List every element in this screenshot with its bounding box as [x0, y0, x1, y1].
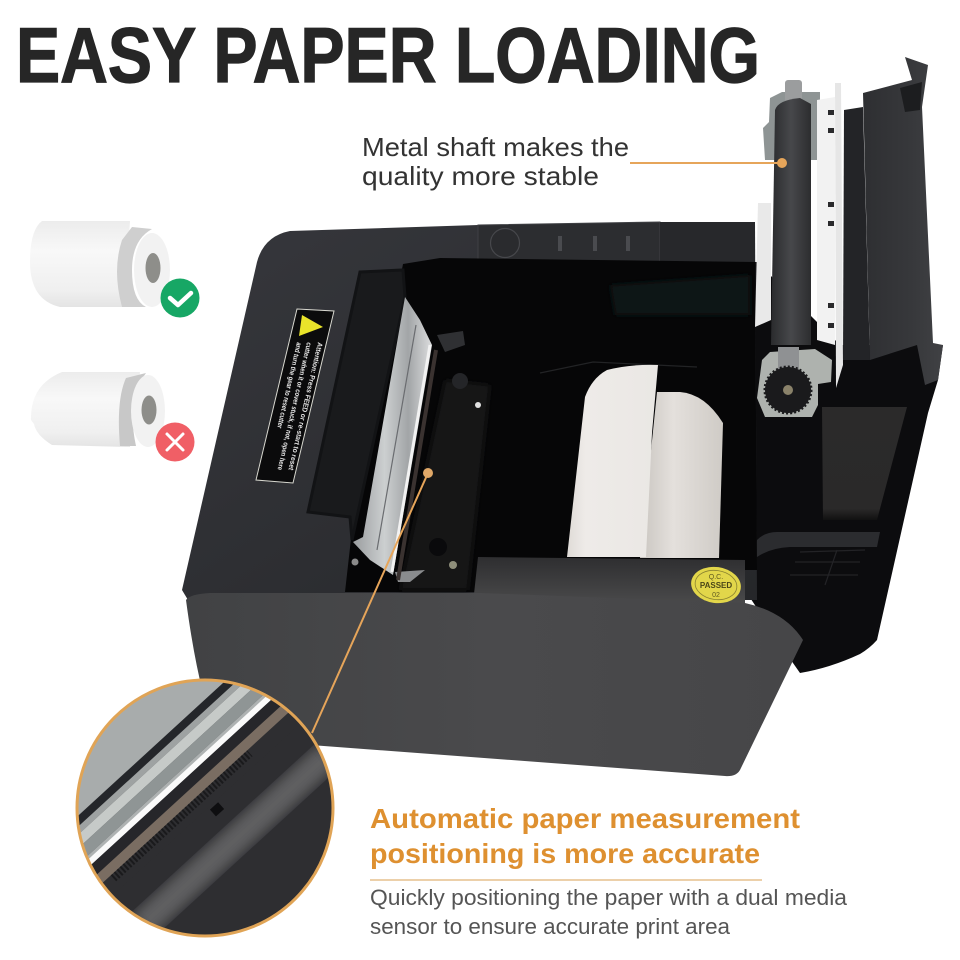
callout: metal shaft text: Metal shaft makes the	[362, 132, 629, 162]
paper well	[345, 258, 757, 592]
QC sticker: PASSED	[700, 581, 732, 590]
paper strip behind roller	[755, 203, 771, 327]
front panel	[186, 593, 803, 776]
icon: red cross	[156, 422, 194, 462]
printer: lower lid body	[745, 262, 943, 673]
gray bracket	[763, 92, 820, 160]
description text: sensor to ensure accurate print area	[370, 914, 731, 939]
callout: metal shaft text: quality more stable	[362, 161, 599, 191]
warning label: cutter when it or cover stuck, if not, open here	[276, 342, 314, 471]
warning label: Attention: Press FEED or re-start to reset	[286, 342, 325, 472]
QC sticker: 02	[712, 592, 720, 599]
leader: metal shaft	[630, 158, 787, 168]
paper roll	[567, 365, 723, 558]
description text	[370, 885, 848, 939]
heading: paper measurement: Automatic paper measurement	[370, 803, 800, 834]
callout: metal shaft text	[362, 132, 629, 191]
open lid	[843, 57, 943, 385]
control panel	[478, 222, 755, 266]
heading: paper measurement	[370, 803, 800, 869]
hinge bracket	[750, 532, 880, 585]
print head: silver bar	[353, 297, 436, 580]
gear bracket	[757, 347, 832, 417]
shelf ridge	[540, 362, 697, 373]
warning label: and turn the gear to reset cutter	[275, 342, 304, 429]
description text: Quickly positioning the paper with a dual media	[370, 885, 848, 910]
lens inset: print head detail	[76, 678, 334, 938]
bad paper roll	[31, 372, 165, 447]
printer: top housing	[182, 222, 757, 600]
warning label	[256, 309, 334, 483]
icon: green check	[160, 278, 200, 318]
good paper roll	[30, 221, 170, 307]
QC sticker: Q.C.	[709, 574, 723, 581]
white plates	[817, 83, 843, 388]
rear shelf	[610, 275, 750, 315]
mechanism shaft	[352, 331, 490, 590]
lid inner panel	[822, 407, 907, 520]
heading underline	[370, 879, 762, 881]
QC sticker	[689, 564, 743, 606]
leader: sensor to lens	[312, 468, 433, 733]
title: EASY PAPER LOADING	[16, 11, 760, 99]
rear ledge	[474, 557, 745, 604]
heading: paper measurement: positioning is more accurate	[370, 838, 760, 869]
left recess	[308, 270, 405, 540]
metal shaft roller	[771, 80, 811, 345]
